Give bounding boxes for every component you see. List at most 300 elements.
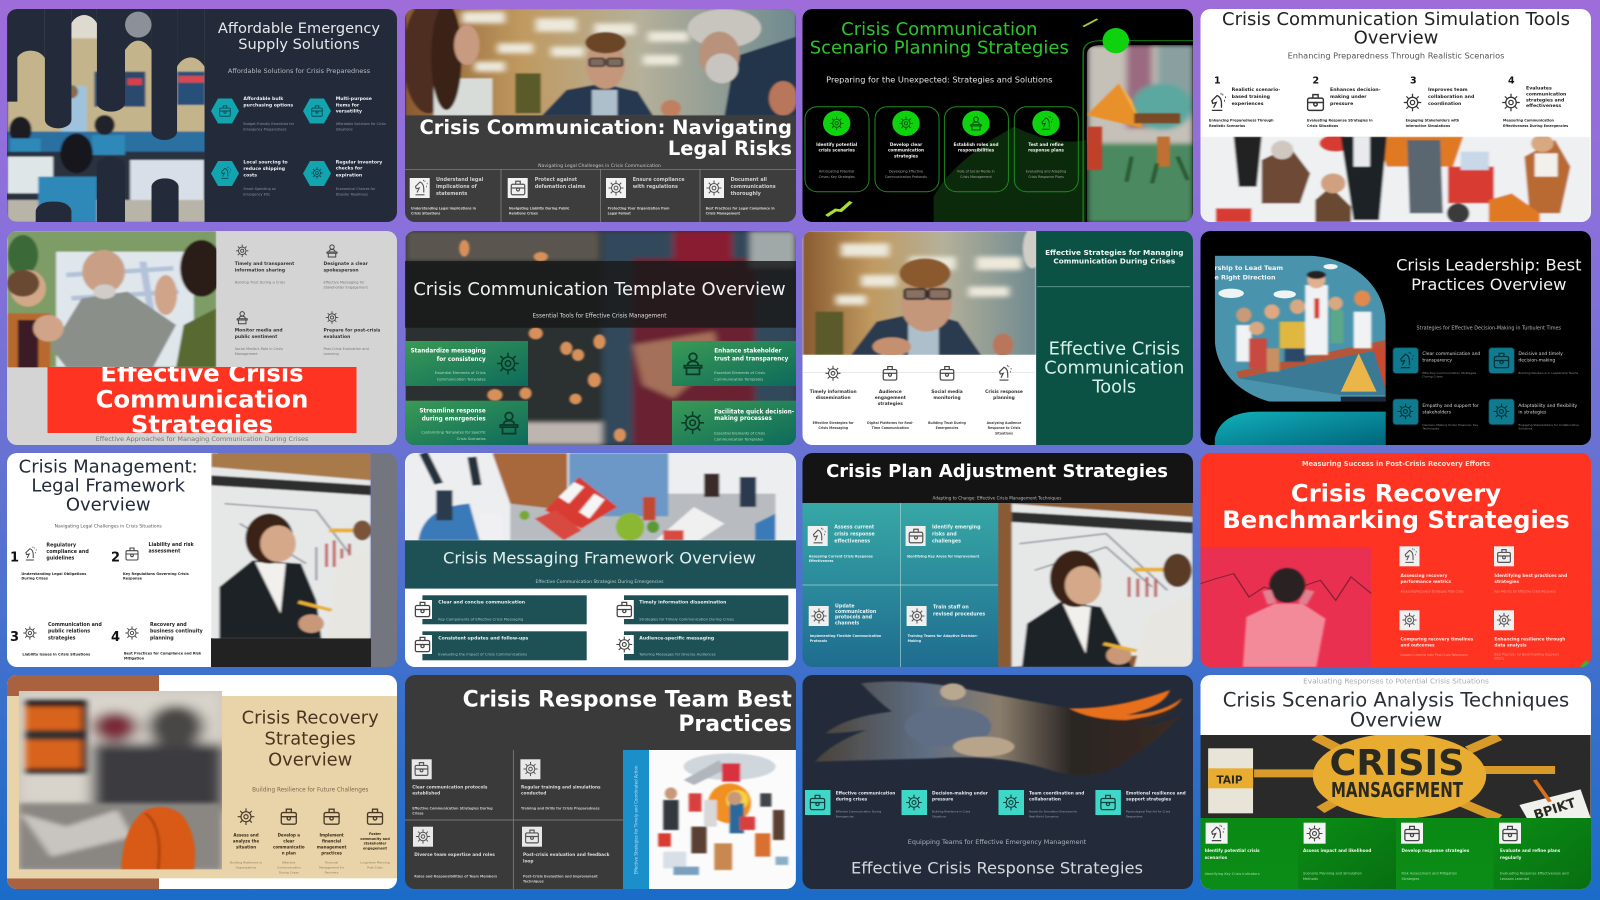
numbered steps: collaboration and bbox=[1428, 94, 1474, 100]
four strategy cards: Communication Protocols bbox=[885, 175, 927, 179]
illustration caption: e Right Direction bbox=[1214, 273, 1276, 281]
adjustment grid: Training Teams for Adaptive Decision- bbox=[908, 634, 979, 638]
item grid with hexagon icons: Multi-purpose bbox=[336, 96, 372, 102]
four tool columns: Crisis response bbox=[985, 389, 1023, 395]
numbered legal items: 3 bbox=[10, 630, 19, 645]
numbered legal items: planning bbox=[150, 636, 174, 642]
title: Crisis Communication Simulation Tools bbox=[1222, 9, 1570, 30]
four practice items bbox=[1393, 348, 1579, 431]
title bbox=[463, 688, 792, 737]
four strategy cards: Evaluating and Adapting bbox=[1026, 170, 1066, 174]
four recovery steps: Develop a bbox=[278, 833, 300, 838]
team practices grid: Crises bbox=[412, 811, 424, 815]
slide background bbox=[405, 453, 796, 667]
four practice items: public sentiment bbox=[235, 334, 278, 340]
adjustment grid bbox=[802, 503, 998, 667]
numbered steps: 1 bbox=[1214, 75, 1221, 86]
four practice items: Stakeholder Engagement bbox=[324, 285, 369, 289]
numbered legal items: Liability and risk bbox=[148, 542, 195, 548]
adjustment grid: Train staff on bbox=[933, 605, 969, 611]
numbered steps: coordination bbox=[1428, 101, 1461, 107]
dark header bbox=[802, 453, 1193, 503]
numbered steps: Evaluates bbox=[1526, 85, 1552, 91]
panel title bbox=[1044, 338, 1184, 397]
four practice items: Building Resilience in Leadership Teams bbox=[1518, 371, 1579, 375]
panel subheading: Effective Strategies for Managing bbox=[1045, 248, 1184, 257]
benchmark items: Key Metrics for Effective Crisis Recovery bbox=[1494, 589, 1556, 593]
four practice items: Decision-Making Under Pressure: Key bbox=[1422, 423, 1478, 427]
slide: Template Overview bbox=[405, 231, 796, 445]
blue vertical band bbox=[623, 750, 649, 889]
numbered legal items: 4 bbox=[111, 630, 120, 645]
numbered legal items: guidelines bbox=[46, 556, 75, 562]
four response items: collaboration bbox=[1029, 796, 1061, 802]
green benefit boxes: for consistency bbox=[437, 357, 486, 363]
slide: Affordable Emergency Supply Solutions bbox=[7, 0, 397, 235]
four recovery steps: Communication bbox=[277, 865, 301, 869]
four recovery steps: analyze the bbox=[233, 839, 259, 844]
four column legal table: Document all bbox=[731, 177, 767, 183]
four practice items: Techniques bbox=[1421, 427, 1440, 431]
benchmark items: Lessons Learned from Post-Crisis Responses bbox=[1400, 653, 1468, 657]
item grid with hexagon icons bbox=[211, 96, 386, 196]
green step columns: Develop response strategies bbox=[1402, 848, 1470, 853]
adjustment grid: crisis response bbox=[834, 532, 876, 538]
four column legal table: Protect against bbox=[535, 177, 578, 183]
title: Crisis Plan Adjustment Strategies bbox=[826, 461, 1168, 482]
teal decorative shape bbox=[1215, 412, 1386, 445]
four response items: Situations bbox=[932, 815, 946, 819]
gray side strip bbox=[371, 453, 397, 667]
four response items: Emergencies bbox=[836, 815, 854, 819]
title: Crisis Response Team Best bbox=[463, 688, 792, 713]
four strategy cards: communication bbox=[888, 148, 924, 153]
four practice items: spokesperson bbox=[324, 267, 359, 273]
title: Overview bbox=[268, 749, 352, 770]
beige panel bbox=[7, 696, 397, 878]
four recovery steps: Organizations bbox=[236, 865, 257, 869]
numbered legal items: Key Regulations Governing Crisis bbox=[123, 572, 189, 576]
green step columns: Identify potential crisis bbox=[1205, 848, 1260, 853]
green step columns bbox=[1200, 818, 1591, 889]
four strategy cards: Develop clear bbox=[890, 142, 923, 147]
title: Strategies bbox=[265, 728, 356, 749]
four recovery steps: engagement bbox=[363, 846, 387, 850]
numbered legal items: Understanding Legal Obligations bbox=[21, 572, 86, 576]
four strategy cards bbox=[805, 107, 1078, 192]
title area text: Crisis Scenario Analysis Techniques bbox=[1223, 689, 1569, 712]
numbered legal items: Response bbox=[123, 577, 143, 581]
adjustment grid: protocols and bbox=[835, 615, 873, 621]
subtitle: Enhancing Preparedness Through Realistic Scenarios bbox=[1288, 50, 1504, 60]
numbered steps: experiences bbox=[1232, 101, 1264, 107]
four practice items: Decisive and timely bbox=[1518, 351, 1563, 357]
four response items: Effective communication bbox=[836, 790, 895, 796]
panel title: Tools bbox=[1091, 376, 1136, 397]
title clipped by banner: Effective Crisis bbox=[100, 359, 304, 388]
green benefit boxes: Communication Templates bbox=[714, 377, 763, 381]
four strategy cards: Test and refine bbox=[1028, 142, 1064, 147]
four strategy cards: Crisis Management bbox=[960, 175, 993, 179]
four tool columns: Analyzing Audience bbox=[987, 421, 1021, 425]
adjustment grid: Assessing Current Crisis Response bbox=[809, 554, 874, 558]
numbered legal items: 2 bbox=[111, 550, 120, 565]
brown corner bars bbox=[7, 675, 159, 889]
adjustment grid: challenges bbox=[932, 538, 961, 544]
subtitle: Building Resilience for Future Challenges bbox=[252, 788, 368, 794]
numbered steps: Crisis Situations bbox=[1307, 124, 1338, 128]
four recovery steps: Assess and bbox=[233, 833, 259, 838]
four response items: Responders bbox=[1126, 815, 1143, 819]
item grid with hexagon icons: Economical Choices for bbox=[336, 187, 376, 191]
four column legal table: Understand legal bbox=[436, 177, 484, 183]
four practice items: decision-making bbox=[1518, 358, 1555, 364]
item grid with hexagon icons: costs bbox=[243, 173, 257, 179]
green step columns: Assess impact and likelihood bbox=[1303, 848, 1371, 853]
title: Practices Overview bbox=[1411, 275, 1566, 294]
four recovery steps: Effective bbox=[282, 860, 295, 864]
green benefit boxes: Enhance stakeholder bbox=[714, 349, 782, 355]
four tool columns: Crisis Messaging bbox=[818, 426, 848, 430]
illustration: leadership team on boat bbox=[1215, 256, 1388, 402]
four tool columns: Audience bbox=[879, 389, 902, 395]
slide background bbox=[405, 675, 796, 889]
title: Crisis Management: bbox=[19, 457, 198, 478]
green benefit boxes: Essential Elements of Crisis bbox=[714, 431, 765, 435]
green benefit boxes: Essential Elements of Crisis bbox=[714, 371, 765, 375]
photo: man in red vest with bokeh lights bbox=[406, 231, 796, 445]
four practice items: information sharing bbox=[235, 267, 285, 273]
four strategy cards: strategies bbox=[894, 153, 918, 158]
four recovery steps: Post-Crisis bbox=[367, 865, 383, 869]
four column legal table: Legal Fallout bbox=[608, 211, 631, 215]
title: Crisis Communication: Navigating bbox=[419, 116, 792, 139]
four recovery steps: management bbox=[317, 845, 346, 850]
title area text: Evaluating Responses to Potential Crisis Situations bbox=[1303, 676, 1489, 685]
four practice items: Post-Crisis Evaluation and bbox=[324, 347, 369, 351]
four recovery steps: Implement bbox=[319, 833, 344, 838]
numbered legal items: Communication and bbox=[48, 622, 102, 628]
slide background bbox=[802, 675, 1193, 889]
four practice items: During Crises bbox=[1422, 375, 1443, 379]
four strategy cards: Identify potential bbox=[816, 142, 858, 147]
photo: wooden crisis management sign bbox=[1201, 733, 1591, 819]
photo: control room behind pill mask bbox=[7, 8, 206, 222]
title: Crisis Recovery bbox=[1291, 478, 1501, 507]
four response items: Decision-making under bbox=[932, 790, 989, 796]
benchmark items: Comparing recovery timelines bbox=[1400, 637, 1474, 643]
photo: woman at chart board bbox=[211, 453, 371, 639]
sign lettering: TAIP bbox=[1217, 774, 1243, 786]
item grid with hexagon icons: expiration bbox=[336, 172, 362, 178]
item grid with hexagon icons: versatility bbox=[336, 109, 362, 115]
numbered steps: Engaging Stakeholders with bbox=[1406, 119, 1460, 123]
item grid with hexagon icons: checks for bbox=[336, 166, 363, 172]
panel title: Communication bbox=[1044, 357, 1184, 378]
four strategy cards: crisis scenarios bbox=[819, 148, 855, 153]
team practices grid: established bbox=[412, 790, 440, 796]
title: Overview bbox=[1354, 27, 1438, 48]
item grid with hexagon icons: Emergency Kits bbox=[243, 192, 270, 196]
benchmark items: Identifying best practices and bbox=[1494, 573, 1567, 579]
green step columns: Methods bbox=[1303, 877, 1318, 881]
photo in wave shape bbox=[815, 681, 1183, 775]
numbered steps: based training bbox=[1232, 94, 1270, 100]
title: Crisis Communication bbox=[841, 19, 1037, 40]
four column legal table: Best Practices for Legal Compliance in bbox=[706, 206, 775, 210]
four column legal table: thoroughly bbox=[731, 191, 762, 197]
adjustment grid: communication bbox=[835, 609, 877, 615]
four practice items: Designate a clear bbox=[324, 261, 369, 267]
photo: man gesturing at whiteboard bbox=[7, 231, 223, 368]
numbered legal items: During Crises bbox=[21, 577, 48, 581]
item grid with hexagon icons: Emergency Preparedness bbox=[243, 127, 287, 131]
benchmark items: Assessing recovery bbox=[1400, 573, 1447, 579]
green step columns: regularly bbox=[1500, 855, 1522, 860]
green step columns: Evaluate and refine plans bbox=[1500, 848, 1561, 853]
team practices grid: Training and Drills for Crisis Preparedness bbox=[521, 806, 600, 810]
four tool columns: Emergencies bbox=[936, 426, 958, 430]
four tool columns: Digital Platforms for Real- bbox=[867, 421, 914, 425]
four column legal table: implications of bbox=[436, 184, 478, 190]
four practice items: stakeholders bbox=[1422, 410, 1452, 416]
title: Affordable Emergency bbox=[218, 20, 380, 37]
illustration: collapsing city block bbox=[406, 453, 796, 541]
numbered steps: 4 bbox=[1508, 75, 1515, 86]
benchmark items: and outcomes bbox=[1400, 642, 1435, 648]
four tool columns: Effective Strategies for bbox=[813, 421, 854, 425]
item grid with hexagon icons: Regular inventory bbox=[336, 159, 382, 165]
slide background bbox=[802, 231, 1036, 445]
four practice items: Clear communication and bbox=[1422, 351, 1480, 357]
adjustment grid: revised procedures bbox=[933, 611, 985, 617]
benchmark items: performance metrics bbox=[1400, 579, 1452, 585]
four recovery steps: Management for bbox=[319, 865, 345, 869]
numbered steps: Interactive Simulations bbox=[1406, 124, 1450, 128]
four response items: Effective Communication During bbox=[836, 809, 881, 813]
slide: Recovery Benchmarking Strategies bbox=[1200, 453, 1591, 667]
four strategy cards: Developing Effective bbox=[889, 170, 923, 174]
numbered steps: strategies and bbox=[1526, 97, 1564, 103]
green step columns: Scenario Planning and Simulation bbox=[1303, 871, 1362, 875]
four practice items: Prepare for post-crisis bbox=[324, 328, 381, 334]
slide background bbox=[1200, 231, 1591, 445]
slide background bbox=[7, 9, 397, 222]
photo: woman at chart board bbox=[998, 503, 1193, 667]
illustration: people reacting to crisis bbox=[1201, 135, 1591, 223]
four strategy cards: Crisis Response Plans bbox=[1028, 175, 1064, 179]
title: Supply Solutions bbox=[238, 36, 360, 53]
title: Effective Crisis Response Strategies bbox=[851, 858, 1143, 877]
title: Crisis Leadership: Best bbox=[1396, 256, 1582, 275]
title bbox=[810, 22, 1068, 57]
photo: blurred meeting and orange glove bbox=[19, 691, 222, 870]
photo: stressed man before falling chart bbox=[1201, 547, 1371, 667]
subtitle: Effective Approaches for Managing Communication During Crises bbox=[96, 435, 309, 443]
title bbox=[419, 116, 792, 160]
subtitle: Essential Tools for Effective Crisis Management bbox=[532, 313, 667, 319]
four practice items: transparency bbox=[1422, 358, 1452, 364]
title: Benchmarking Strategies bbox=[1222, 505, 1570, 534]
four tool columns: engagement bbox=[875, 395, 906, 401]
four response items: pressure bbox=[932, 796, 953, 802]
panel divider bbox=[1037, 286, 1190, 288]
subtitle: Preparing for the Unexpected: Strategies and Solutions bbox=[826, 75, 1052, 85]
four column legal table: Crisis Situations bbox=[411, 211, 440, 215]
four message boxes: Strategies for Timely Communication During Crises bbox=[639, 617, 734, 621]
title clipped by banner bbox=[96, 367, 307, 433]
four recovery steps: clear bbox=[283, 839, 294, 844]
subtitle: Navigating Legal Challenges in Crisis Situations bbox=[55, 523, 162, 529]
adjustment grid: Update bbox=[835, 603, 855, 609]
title bbox=[1396, 256, 1582, 294]
subtitle: Affordable Solutions for Crisis Preparedness bbox=[228, 67, 371, 75]
four tool columns: Timely information bbox=[810, 389, 857, 395]
dark title band bbox=[405, 261, 796, 328]
item grid with hexagon icons: reduce shipping bbox=[243, 166, 285, 172]
four column legal table: Understanding Legal Implications in bbox=[411, 206, 477, 210]
four tool columns: strategies bbox=[878, 401, 903, 407]
numbered legal items: Regulatory bbox=[46, 542, 77, 548]
title: Scenario Planning Strategies bbox=[810, 37, 1069, 58]
four recovery steps: situation bbox=[236, 845, 256, 850]
green benefit boxes bbox=[405, 341, 796, 445]
team practices grid: conducted bbox=[521, 790, 546, 796]
numbered legal items bbox=[10, 542, 204, 660]
four recovery steps: n plan bbox=[282, 851, 296, 856]
four strategy cards: response plans bbox=[1028, 148, 1064, 153]
four message boxes: Evaluating the Impact of Crisis Communications bbox=[438, 653, 527, 657]
four practice items: evaluation bbox=[324, 334, 350, 340]
four tool columns: Situations bbox=[995, 431, 1013, 435]
benchmark items: Efforts bbox=[1494, 657, 1505, 661]
team practices grid bbox=[405, 750, 623, 889]
four recovery steps: Building Resilience in bbox=[230, 860, 262, 864]
numbered steps: 3 bbox=[1410, 75, 1417, 86]
team practices grid: Clear communication protocols bbox=[412, 784, 488, 790]
green step columns: scenarios bbox=[1205, 855, 1228, 860]
four tool columns: Social media bbox=[931, 389, 963, 395]
four response items: Hands-On Simulation Exercises for bbox=[1029, 809, 1078, 813]
slide: Effective Crisis Response Strategies bbox=[802, 675, 1193, 889]
title area text: Overview bbox=[1350, 709, 1442, 732]
four response items: during crises bbox=[836, 796, 868, 802]
numbered steps: Effectiveness During Emergencies bbox=[1503, 124, 1568, 128]
title clipped by banner: Strategies bbox=[131, 409, 273, 438]
green benefit boxes: trust and transparency bbox=[714, 357, 789, 363]
green step columns: Identifying Key Crisis Indicators bbox=[1205, 872, 1260, 876]
item grid with hexagon icons: Affordable bulk bbox=[243, 96, 284, 102]
sign lettering: CRISIS bbox=[1330, 743, 1464, 784]
four response items: support strategies bbox=[1126, 796, 1171, 802]
illustration caption bbox=[1214, 264, 1283, 281]
slide background bbox=[7, 675, 397, 889]
slide background bbox=[405, 9, 796, 222]
four column legal table: statements bbox=[436, 191, 467, 197]
photo: megaphone crowd bbox=[1087, 45, 1194, 223]
adjustment grid: channels bbox=[835, 620, 859, 626]
team practices grid: Regular training and simulations bbox=[521, 784, 601, 790]
four column legal table: defamation claims bbox=[535, 184, 586, 190]
four practice items: Social Media's Role in Crisis bbox=[235, 347, 283, 351]
four strategy cards: Role of Social Media in bbox=[957, 170, 995, 174]
numbered steps: Evaluating Response Strategies in bbox=[1307, 119, 1373, 123]
slide background bbox=[7, 453, 218, 667]
four tool columns: Building Trust During bbox=[928, 421, 966, 425]
slide: Crisis Communication Navigating Legal Risks bbox=[403, 0, 797, 222]
title: Crisis Communication Template Overview bbox=[413, 279, 786, 300]
item grid with hexagon icons: Smart Spending on bbox=[243, 187, 276, 191]
four message boxes: Tailoring Messages for Diverse Audiences bbox=[638, 653, 716, 657]
title: Legal Framework bbox=[31, 475, 186, 496]
four column legal table: Navigating Liability During Public bbox=[509, 206, 570, 210]
numbered steps: pressure bbox=[1330, 101, 1353, 107]
green benefit boxes: Facilitate quick decision- bbox=[714, 409, 795, 415]
team practices grid: Diverse team expertise and roles bbox=[414, 852, 495, 858]
four column legal table bbox=[405, 169, 796, 222]
green benefit boxes: during emergencies bbox=[422, 416, 486, 422]
title: Legal Risks bbox=[668, 137, 792, 160]
numbered steps: Measuring Communication bbox=[1503, 119, 1555, 123]
four strategy cards: Anticipating Potential bbox=[819, 170, 854, 174]
numbered legal items: compliance and bbox=[46, 549, 89, 555]
title bbox=[1223, 12, 1570, 44]
numbered legal items: business continuity bbox=[150, 629, 204, 635]
adjustment grid: Effectiveness bbox=[809, 559, 833, 563]
title: Crisis Recovery bbox=[242, 707, 379, 728]
four practice items: Effective Messaging for bbox=[324, 280, 365, 284]
subtitle: Strategies for Effective Decision-Making in Turbulent Times bbox=[1417, 325, 1561, 331]
numbered legal items: public relations bbox=[48, 629, 90, 635]
four message boxes bbox=[413, 595, 788, 660]
four response items bbox=[805, 790, 1186, 819]
four strategy cards: Establish roles and bbox=[954, 142, 998, 147]
adjustment grid: Assess current bbox=[834, 525, 875, 531]
title area text bbox=[1223, 676, 1569, 732]
four response items: Building Resilience in Crisis bbox=[932, 809, 971, 813]
slide background bbox=[1200, 453, 1591, 667]
numbered steps: Enhances decision- bbox=[1330, 87, 1381, 93]
green benefit boxes: Customizing Templates for Specific bbox=[421, 431, 486, 435]
numbered steps bbox=[1209, 75, 1568, 128]
four practice items: Management bbox=[235, 352, 258, 356]
numbered steps: Enhancing Preparedness Through bbox=[1209, 119, 1274, 123]
item grid with hexagon icons: Disaster Readiness bbox=[336, 192, 368, 196]
adjustment grid: Making bbox=[908, 639, 922, 643]
benchmark items: strategies bbox=[1494, 579, 1519, 585]
slide background bbox=[1200, 675, 1591, 889]
four column legal table: Ensure compliance bbox=[633, 177, 685, 183]
adjustment grid: effectiveness bbox=[834, 538, 870, 544]
vertical band caption: Effective Strategies for Timely and Coordinated Action bbox=[634, 765, 638, 874]
subtitle: Adapting to Change: Effective Crisis Management Techniques bbox=[933, 496, 1061, 501]
numbered legal items: Recovery and bbox=[150, 622, 187, 628]
green step columns: Evaluating Response Effectiveness and bbox=[1500, 871, 1569, 875]
slide: Crisis Leadership Best Practices bbox=[1200, 231, 1591, 445]
four response items: Real-World Scenarios bbox=[1029, 815, 1059, 819]
numbered steps: Realistic Scenarios bbox=[1209, 124, 1245, 128]
numbered steps: effectiveness bbox=[1526, 103, 1561, 109]
slide: Effective Crisis Communication Tools bbox=[802, 228, 1193, 445]
four response items: Team coordination and bbox=[1029, 790, 1084, 796]
four practice items: Learning bbox=[324, 352, 339, 356]
numbered steps: 2 bbox=[1312, 75, 1319, 86]
numbered steps: Realistic scenario- bbox=[1232, 87, 1280, 93]
title bbox=[218, 20, 380, 53]
title bbox=[19, 457, 198, 515]
green benefit boxes: Essential Elements of Crisis bbox=[435, 371, 486, 375]
four message boxes: Key Components of Effective Crisis Messaging bbox=[438, 617, 523, 621]
